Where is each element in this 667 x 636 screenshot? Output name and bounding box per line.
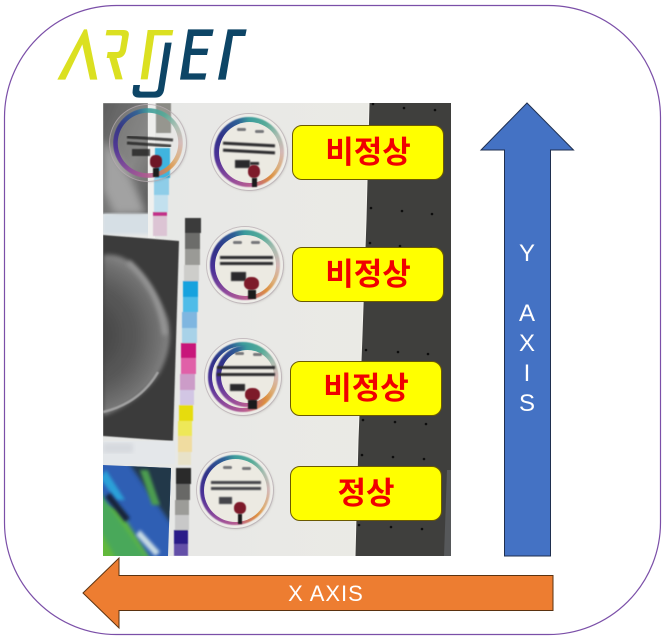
- label: abnormal 3: 비정상: [323, 371, 409, 406]
- label: abnormal 1: 비정상: [325, 135, 411, 170]
- arrow: Y axis: S: [519, 390, 535, 417]
- bottom colour strip: [174, 468, 191, 556]
- middle fur print: [103, 235, 179, 464]
- arrow: Y axis: Y: [519, 240, 535, 267]
- label: normal: 정상: [337, 476, 395, 511]
- bottom colour print: [103, 465, 171, 556]
- label: abnormal 1: [292, 125, 444, 180]
- circle 3: [207, 227, 283, 303]
- top colour strip: [153, 103, 171, 236]
- arrow: Y axis: A: [519, 300, 535, 327]
- circle 5 (normal): [197, 452, 273, 528]
- label: abnormal 2: [292, 247, 444, 302]
- circle 1 (over print): [110, 105, 186, 181]
- circle 2: [211, 114, 287, 190]
- label: normal: [290, 466, 442, 521]
- label: abnormal 3: [290, 361, 442, 416]
- arrow: X axis: X AXIS: [288, 581, 364, 606]
- arrow: Y axis: X: [519, 330, 535, 357]
- photo of printed test circles: [103, 103, 451, 556]
- top-left fur print: [103, 103, 155, 238]
- circle 4 (doubled ring): [205, 339, 281, 415]
- machine bed: [355, 103, 451, 556]
- label: abnormal 2: 비정상: [325, 257, 411, 292]
- arrow: Y axis: I: [524, 360, 530, 387]
- middle colour strip: [178, 218, 201, 465]
